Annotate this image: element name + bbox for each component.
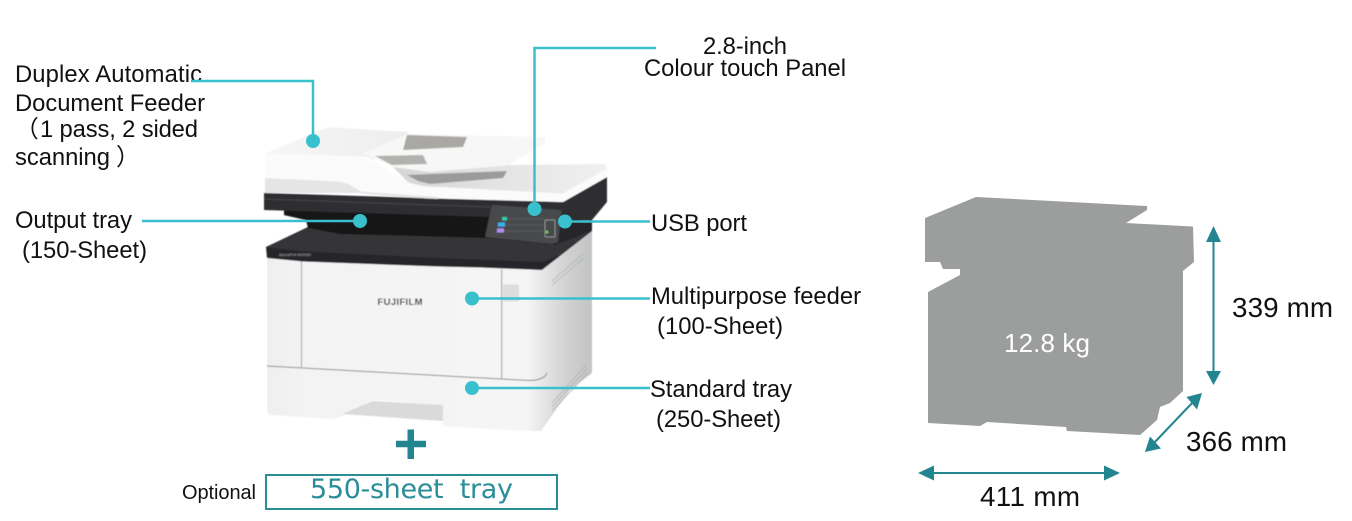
label: touch panel [644, 33, 846, 82]
ADF front face [265, 154, 607, 202]
printer silhouette with weight: 12.8 kg [1004, 328, 1090, 358]
optional tray box [266, 474, 557, 509]
label: multipurpose feeder: (100-Sheet) [657, 313, 783, 340]
icon: plus [396, 430, 426, 459]
band highlight [264, 199, 490, 207]
dimension: width: 411 mm [980, 481, 1080, 512]
label: standard tray: (250-Sheet) [656, 406, 781, 433]
lower guide [375, 155, 427, 165]
panel icons [497, 217, 555, 237]
callout: standard tray [465, 381, 650, 395]
label: USB port: USB port [651, 210, 747, 237]
document guide [403, 135, 467, 150]
label: duplex automatic document feeder: （ [15, 116, 39, 143]
label: output tray: (150-Sheet) [22, 237, 147, 264]
label: standard tray: Standard tray [650, 376, 792, 403]
model name: ApeosPort 4020SD [279, 252, 311, 257]
printer silhouette with weight [925, 197, 1194, 435]
arrow: height [1206, 226, 1221, 385]
dimension: height: 339 mm [1232, 292, 1333, 323]
label: standard tray [650, 376, 792, 433]
callout: document feeder [191, 81, 320, 148]
callout: multipurpose feeder [465, 292, 650, 306]
door latch [503, 284, 519, 302]
label: output tray: Output tray [15, 207, 132, 234]
paper tray [267, 360, 592, 431]
output cavity [284, 210, 490, 238]
touch panel [485, 205, 562, 244]
exit bed and cavity [266, 209, 592, 270]
callout: output tray [142, 214, 367, 228]
output tray recess [393, 164, 607, 194]
optional tray box: 550-sheet tray [310, 474, 513, 505]
label: duplex automatic document feeder: Document Feeder [15, 90, 205, 117]
callout: USB port [558, 214, 650, 228]
label: duplex automatic document feeder: ） [116, 144, 140, 171]
arrow: width [918, 466, 1120, 480]
label: duplex automatic document feeder: 1 pass, 2 sided [40, 116, 198, 143]
label: duplex automatic document feeder: Duplex Automatic [15, 61, 202, 88]
dimension: depth: 366 mm [1186, 426, 1287, 457]
ADF exit slot [407, 171, 507, 184]
label: duplex automatic document feeder: scanning [15, 144, 110, 171]
callout: touch panel [528, 48, 656, 216]
label: touch panel: 2.8-inch [703, 33, 787, 60]
ADF lower front strip [265, 178, 438, 199]
printer body [267, 230, 592, 400]
label: multipurpose feeder [651, 283, 861, 340]
paper slot shadow [342, 401, 443, 421]
exit bed top [266, 228, 592, 262]
callout lines [142, 48, 656, 395]
arrow: depth [1145, 393, 1202, 452]
side vents [552, 254, 588, 411]
label: optional: Optional [182, 482, 256, 504]
label: duplex automatic document feeder [15, 61, 205, 171]
label: touch panel: Colour touch Panel [644, 55, 846, 82]
label: multipurpose feeder: Multipurpose feeder [651, 283, 861, 310]
tray seam [267, 366, 547, 380]
scanner dark band [264, 177, 607, 220]
printer illustration [264, 127, 607, 431]
brand logo: FUJIFILM [378, 297, 423, 308]
label: output tray [15, 207, 147, 264]
door seams [302, 260, 502, 379]
ADF top surface [265, 127, 408, 160]
document tray [363, 134, 545, 172]
